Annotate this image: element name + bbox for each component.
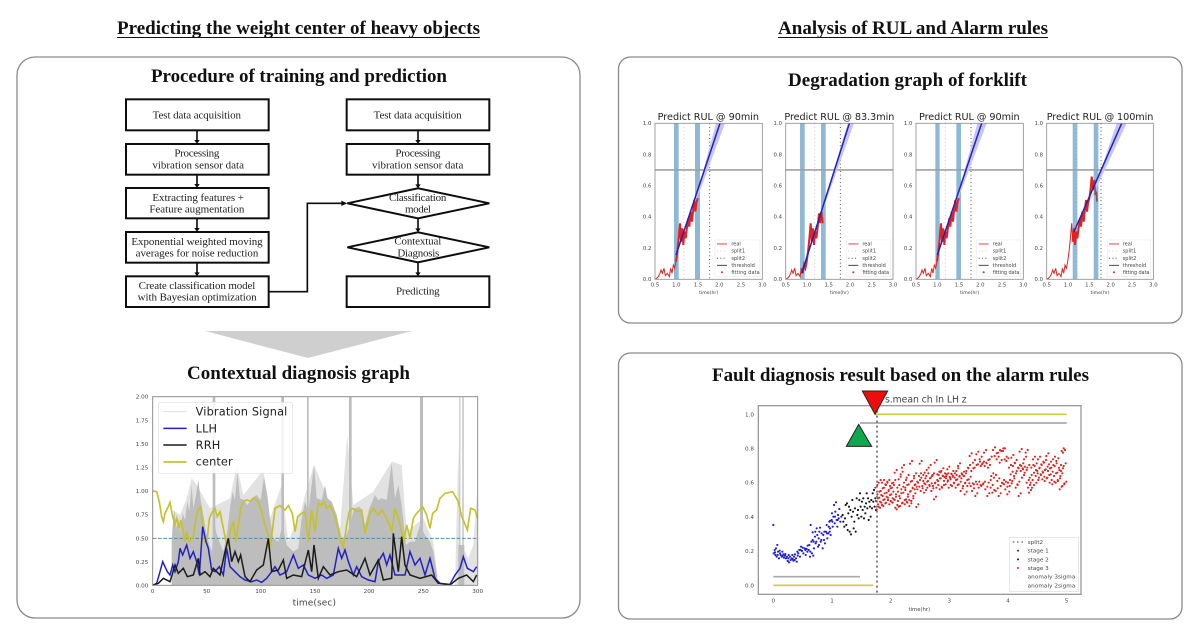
flow text: Feature augmentation (149, 204, 245, 216)
chart: RUL at 90 min, second: 0.6 (904, 183, 913, 189)
legend (1009, 537, 1078, 592)
legend: stage 3 (1028, 566, 1049, 572)
x axis labels: 250 (418, 589, 429, 595)
y axis labels (745, 412, 754, 589)
vibration signal, dense (172, 463, 438, 585)
flow text: vibration sensor data (152, 160, 244, 172)
RRH line (153, 533, 477, 585)
chart: RUL at 90 min, first: split2 (731, 256, 745, 262)
y axis labels: 1.0 (745, 412, 754, 418)
y axis labels: 2.00 (136, 395, 149, 401)
chart: RUL at 100 min: Predict RUL @ 100min (1047, 112, 1153, 123)
chart: RUL at 100 min: 0.8 (1035, 152, 1044, 158)
chart: RUL at 100 min: 0.5 (1042, 283, 1051, 289)
legend: stage 1 (1028, 549, 1049, 555)
heading: degradation graph of forklift: Degradation graph of forklift (788, 70, 1028, 91)
x axis labels: 0 (151, 589, 155, 595)
y axis labels: 0.0 (745, 583, 754, 589)
chart: RUL at 90 min, second: 0.0 (904, 277, 913, 283)
legend: RRH (196, 438, 220, 452)
x axis labels: 4 (1006, 598, 1010, 604)
flow text: Contextual (394, 236, 441, 248)
chart: RUL at 90 min, second: split1 (993, 249, 1006, 255)
flow text: averages for noise reduction (136, 248, 259, 260)
heading: fault diagnosis result: Fault diagnosis result based on the alarm rules (712, 365, 1089, 386)
chart: RUL at 83.3 min: 2.0 (846, 283, 855, 289)
y axis labels: 0.8 (745, 447, 754, 453)
x axis labels: 3 (948, 598, 952, 604)
flow text: Test data acquisition (374, 110, 462, 122)
chart: RUL at 100 min: real (1123, 242, 1132, 248)
chart: RUL at 100 min: 1.0 (1035, 121, 1044, 127)
legend: anomaly 3sigma (1028, 575, 1075, 581)
chart: fault diagnosis scatter (745, 391, 1081, 613)
chart: RUL at 100 min: 0.2 (1035, 246, 1043, 252)
x axis labels: 100 (255, 589, 266, 595)
chart: RUL at 83.3 min: 0.5 (781, 283, 790, 289)
chart: RUL at 90 min, first: fitting data (731, 270, 760, 276)
heading: left section: Predicting the weight center of heavy objects (117, 18, 480, 39)
LLH line (153, 527, 477, 585)
chart: RUL at 83.3 min: Predict RUL @ 83.3min (784, 112, 894, 123)
chart: RUL at 90 min, second: 2.5 (998, 283, 1006, 289)
chart: RUL at 83.3 min: real (862, 242, 872, 248)
y axis labels: 0.6 (745, 481, 754, 487)
chart: RUL at 90 min, first: 0.4 (643, 215, 652, 221)
chart: RUL at 100 min: 2.5 (1128, 283, 1136, 289)
chart: RUL at 90 min, first: 2.5 (737, 283, 745, 289)
chart: RUL at 100 min: split1 (1123, 249, 1136, 255)
flow text: with Bayesian optimization (138, 292, 257, 304)
legend: center (196, 455, 233, 469)
chart: RUL at 90 min, first: 0.2 (643, 246, 651, 252)
panel: fault diagnosis (618, 353, 1182, 619)
chart: RUL at 90 min, first: Predict RUL @ 90min (658, 112, 759, 123)
chart: RUL at 90 min, first: 0.0 (643, 277, 652, 283)
chart: RUL at 83.3 min: 1.5 (824, 283, 833, 289)
axes frame (758, 406, 1081, 594)
flow text: Processing (174, 148, 220, 160)
stage 2 points (843, 490, 876, 534)
legend: Vibration Signal (196, 404, 287, 418)
chart: RUL at 90 min, second: Predict RUL @ 90min (919, 112, 1020, 123)
x axis labels: 50 (203, 589, 211, 595)
vibration signal, spikes (213, 397, 464, 585)
chart: RUL at 100 min: 0.0 (1035, 277, 1044, 283)
vibration signal, light (172, 435, 478, 585)
flow text: Extracting features + (152, 192, 244, 204)
flow text (131, 110, 463, 304)
chart: RUL at 90 min, second: split2 (993, 256, 1006, 262)
y axis labels: 1.75 (136, 418, 149, 424)
x axis labels: 300 (472, 589, 483, 595)
y axis labels: 1.00 (136, 489, 149, 495)
flow text: model (405, 204, 431, 216)
stage 3 points (875, 447, 1066, 509)
legend: split2 (1028, 540, 1044, 546)
chart: RUL at 90 min, second: 0.8 (904, 152, 913, 158)
chart: RUL at 83.3 min: 0.6 (774, 183, 783, 189)
chart: RUL at 83.3 min: 3.0 (889, 283, 898, 289)
icon: red down triangle, fault alarm (862, 391, 888, 414)
flow text: Create classification model (139, 280, 255, 292)
chart: RUL at 83.3 min: split1 (862, 249, 876, 255)
flow text: vibration sensor data (372, 160, 463, 172)
threshold line (153, 537, 478, 540)
chart: RUL at 90 min, second: fitting data (993, 270, 1019, 276)
y axis labels: 1.25 (136, 465, 149, 471)
alarm level lines (773, 414, 1067, 585)
y axis labels: 1.50 (136, 442, 149, 448)
chart: RUL at 90 min, first: 0.8 (643, 152, 652, 158)
chart: RUL at 90 min, second: 1.0 (904, 121, 913, 127)
chart: RUL at 83.3 min: split2 (862, 256, 876, 262)
chart: RUL at 100 min: fitting data (1123, 270, 1149, 276)
chart: RUL at 90 min, second: real (993, 242, 1002, 248)
chart: RUL at 90 min, first: 1.0 (643, 121, 652, 127)
x axis labels: 150 (310, 589, 321, 595)
x axis labels: 1 (830, 598, 834, 604)
flowchart: training and prediction (126, 99, 489, 307)
legend (158, 402, 292, 473)
x axis labels (151, 589, 483, 595)
arrow: down from flowchart to graph (205, 331, 412, 358)
chart: RUL at 83.3 min: fitting data (862, 270, 889, 276)
chart: RUL at 90 min, first: 0.5 (651, 283, 659, 289)
chart: RUL at 83.3 min: 2.5 (867, 283, 876, 289)
chart: RUL at 90 min, second: 0.4 (904, 215, 913, 221)
chart: RUL at 83.3 min: 0.4 (774, 215, 783, 221)
center line (153, 491, 478, 548)
flow text: Predicting (396, 286, 440, 298)
prediction boxes and diamonds (347, 99, 489, 307)
chart: RUL at 100 min (1035, 112, 1158, 296)
y axis labels: 0.00 (136, 583, 149, 589)
chart: RUL at 90 min, first: threshold (731, 263, 755, 269)
chart: RUL at 90 min, second: 0.5 (912, 283, 920, 289)
flow text: Test data acquisition (153, 110, 241, 122)
chart: RUL at 83.3 min: 1.0 (774, 121, 783, 127)
flow arrows (194, 130, 421, 292)
chart: RUL at 90 min, second: 2.0 (976, 283, 985, 289)
chart: RUL at 90 min, first: 1.0 (672, 283, 681, 289)
chart: RUL at 90 min, second: 1.5 (955, 283, 963, 289)
x axis labels: 5 (1065, 598, 1069, 604)
axes frame (153, 397, 478, 585)
chart title: s.mean ch In LH z (885, 394, 967, 405)
chart: RUL at 90 min, second: 1.0 (933, 283, 942, 289)
heading: contextual diagnosis graph: Contextual diagnosis graph (187, 363, 410, 384)
chart: RUL at 83.3 min: time(hr) (830, 290, 849, 296)
chart: RUL at 100 min: time(hr) (1091, 290, 1110, 296)
flow text: Diagnosis (397, 248, 439, 260)
chart: RUL at 90 min, first: split1 (731, 249, 745, 255)
chart: RUL at 90 min, first: real (731, 242, 741, 248)
chart: RUL at 83.3 min: 1.0 (803, 283, 812, 289)
chart: RUL at 90 min, first: 0.6 (643, 183, 652, 189)
flow text: Exponential weighted moving (131, 236, 263, 248)
heading: right section: Analysis of RUL and Alarm rules (778, 18, 1048, 39)
x axis labels: 2 (889, 598, 893, 604)
chart: RUL at 83.3 min: threshold (862, 263, 886, 269)
x axis labels: 200 (364, 589, 375, 595)
icon: green up triangle, warning alarm (846, 424, 872, 446)
chart: RUL at 90 min, second: 0.2 (904, 246, 912, 252)
chart: RUL at 90 min, first: time(hr) (699, 290, 718, 296)
panel: degradation graph (618, 57, 1182, 323)
chart: RUL at 100 min: 1.5 (1085, 283, 1094, 289)
y axis labels: 0.75 (136, 513, 149, 519)
chart: RUL at 90 min, second: threshold (993, 263, 1016, 269)
panel: weight center prediction (17, 57, 580, 618)
y axis labels: 0.2 (745, 549, 754, 555)
flow text: Processing (395, 148, 441, 160)
chart: RUL at 90 min, second (904, 112, 1028, 296)
chart: RUL at 100 min: 3.0 (1149, 283, 1158, 289)
chart: RUL at 90 min, first: 3.0 (758, 283, 767, 289)
chart: RUL at 100 min: split2 (1123, 256, 1136, 262)
chart: RUL at 90 min, first: 2.0 (715, 283, 724, 289)
chart: RUL at 100 min: 1.0 (1064, 283, 1073, 289)
chart: RUL at 90 min, second: 3.0 (1019, 283, 1028, 289)
chart: RUL at 90 min, second: time(hr) (960, 290, 979, 296)
heading: procedure of training and prediction: Procedure of training and prediction (151, 66, 447, 87)
chart: RUL at 100 min: 2.0 (1106, 283, 1116, 289)
y axis labels: 0.4 (745, 515, 754, 521)
x axis title: time(sec) (293, 598, 336, 608)
chart: RUL at 90 min, first (643, 112, 767, 296)
x axis labels (772, 598, 1069, 604)
chart: RUL at 83.3 min: 0.2 (774, 246, 782, 252)
chart: RUL at 100 min: 0.4 (1035, 215, 1044, 221)
chart: RUL at 100 min: threshold (1123, 263, 1146, 269)
chart: contextual diagnosis (136, 395, 483, 608)
legend: stage 2 (1028, 557, 1049, 563)
x axis title: time(hr) (908, 607, 930, 613)
x axis labels: 0 (772, 598, 776, 604)
chart: RUL at 83.3 min (774, 112, 898, 296)
legend: LLH (196, 421, 217, 435)
flow text: Classification (389, 192, 447, 204)
split line (874, 406, 879, 594)
chart: RUL at 83.3 min: 0.0 (774, 277, 783, 283)
chart: RUL at 90 min, first: 1.5 (694, 283, 702, 289)
y axis labels: 0.25 (136, 560, 149, 566)
stage 1 points (773, 502, 841, 562)
y axis labels: 0.50 (136, 536, 149, 542)
y axis labels (136, 395, 149, 589)
chart: RUL at 100 min: 0.6 (1035, 183, 1044, 189)
training boxes (126, 99, 269, 307)
chart: RUL at 83.3 min: 0.8 (774, 152, 783, 158)
legend: anomaly 2sigma (1028, 583, 1075, 589)
